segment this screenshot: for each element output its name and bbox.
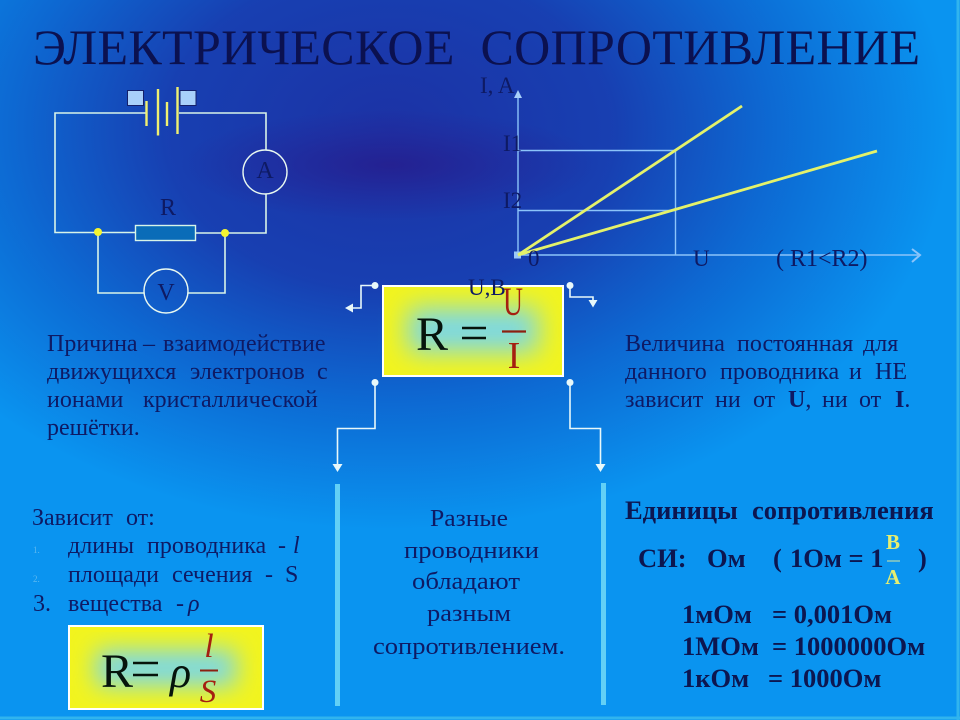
graph labels: I, A [480,73,515,98]
resistor [136,195,196,240]
connector arrows [332,282,606,472]
units heading: сопротивления [752,495,934,525]
units heading: Единицы [625,495,738,525]
text: cause: решётки. [47,415,140,441]
circuit wires [55,113,266,293]
text: different conductors: сопротивлением. [373,634,565,660]
text: depends on: проводника [147,533,267,559]
SI unit line: ( [773,543,782,573]
text: depends on: - [265,562,273,588]
formula box: R = U / I: R [416,308,448,361]
formula box: R = U / I [382,279,564,377]
text: constant for given conductor: , [805,387,811,413]
text: constant for given conductor: I [895,387,904,413]
formula box: R = U / I: I [508,335,520,377]
unit conversions: = 1000000Ом [772,631,925,661]
graph lines [518,106,877,255]
text: depends on [32,505,300,617]
text: constant for given conductor: постоянная [737,331,853,357]
text: constant for given conductor: от [753,387,776,413]
text: cause: взаимодействие [163,331,325,357]
graph labels: U [693,246,710,271]
text: constant for given conductor [625,331,910,413]
graph labels: 0 [528,246,540,271]
formula box: R = rho l / S: ρ [168,648,191,697]
text: depends on: вещества [68,591,162,617]
text: depends on: сечения [172,562,252,588]
text: depends on: l [293,533,300,559]
resistor: R [160,195,176,221]
text: cause: – [142,331,156,357]
SI unit line: Ом [707,543,746,573]
vertical divider left [335,484,340,706]
text: depends on: от: [126,505,155,531]
graph label over box: U,B [468,275,506,300]
SI unit line: 1Ом = 1 [790,543,884,573]
unit conversions: = 1000Ом [768,663,881,693]
graph labels: I2 [503,188,522,213]
text: depends on: S [285,562,298,588]
text: depends on: 1. [33,545,40,555]
text: constant for given conductor: Величина [625,331,725,357]
text: constant for given conductor: проводника [720,359,840,385]
unit conversions: 1МОм [682,631,759,661]
text: constant for given conductor: ни [715,387,741,413]
formula box: R = rho l / S [68,625,264,710]
graph axes and guide lines [518,94,920,262]
fraction V over A [885,530,901,589]
text: constant for given conductor: от [859,387,882,413]
battery [128,87,196,136]
text: depends on: - [176,591,184,617]
text: constant for given conductor: U [788,387,805,413]
text: different conductors [373,506,565,660]
text: depends on: Зависит [32,505,113,531]
text: different conductors: Разные [430,506,508,532]
unit conversions: = 0,001Ом [772,599,892,629]
SI unit line: СИ: [638,543,687,573]
text: constant for given conductor: данного [625,359,707,385]
circuit diagram [55,87,287,313]
text: cause: с [317,359,328,385]
text: depends on: площади [68,562,159,588]
unit conversions [682,599,925,693]
formula box: R = U / I: U [503,279,523,324]
text: depends on: - [278,533,286,559]
text: cause: кристаллической [143,387,318,413]
text: constant for given conductor: зависит [625,387,703,413]
junction dots [94,228,229,237]
unit conversions: 1мОм [682,599,752,629]
text: cause: электронов [190,359,305,385]
SI unit line: ) [918,543,927,573]
title: ЭЛЕКТРИЧЕСКОЕ СОПРОТИВЛЕНИЕ [33,19,920,75]
text: depends on: длины [68,533,134,559]
ammeter [243,150,287,194]
SI unit line [638,530,927,589]
ammeter: A [256,158,274,184]
formula box: R = rho l / S: l [204,628,214,665]
fraction V over A: А [885,565,901,589]
text: depends on: 2. [33,574,40,584]
text: constant for given conductor: . [904,387,910,413]
graph labels: I1 [503,131,522,156]
current-voltage graph [480,73,920,272]
fraction V over A: В [886,530,900,554]
text: depends on: 3. [33,591,51,617]
graph labels [480,73,868,272]
formula box: R = rho l / S: S [200,674,216,710]
text: cause: Причина [47,331,138,357]
unit conversions: 1кОм [682,663,749,693]
text: constant for given conductor: ни [822,387,848,413]
formula box: R = rho l / S: R [101,645,133,698]
text: cause: движущихся [47,359,176,385]
voltmeter: V [157,280,175,306]
text: different conductors: обладают [412,569,521,595]
text: constant for given conductor: для [863,331,898,357]
voltmeter [144,269,188,313]
text: constant for given conductor: НЕ [875,359,907,385]
text: different conductors: проводники [404,538,539,564]
text: cause: ионами [47,387,123,413]
graph labels: ( R1<R2) [776,246,868,272]
text: cause [47,331,328,441]
text: constant for given conductor: и [849,359,862,385]
vertical divider right [601,483,606,705]
text: depends on: ρ [187,591,200,617]
text: different conductors: разным [427,601,511,627]
